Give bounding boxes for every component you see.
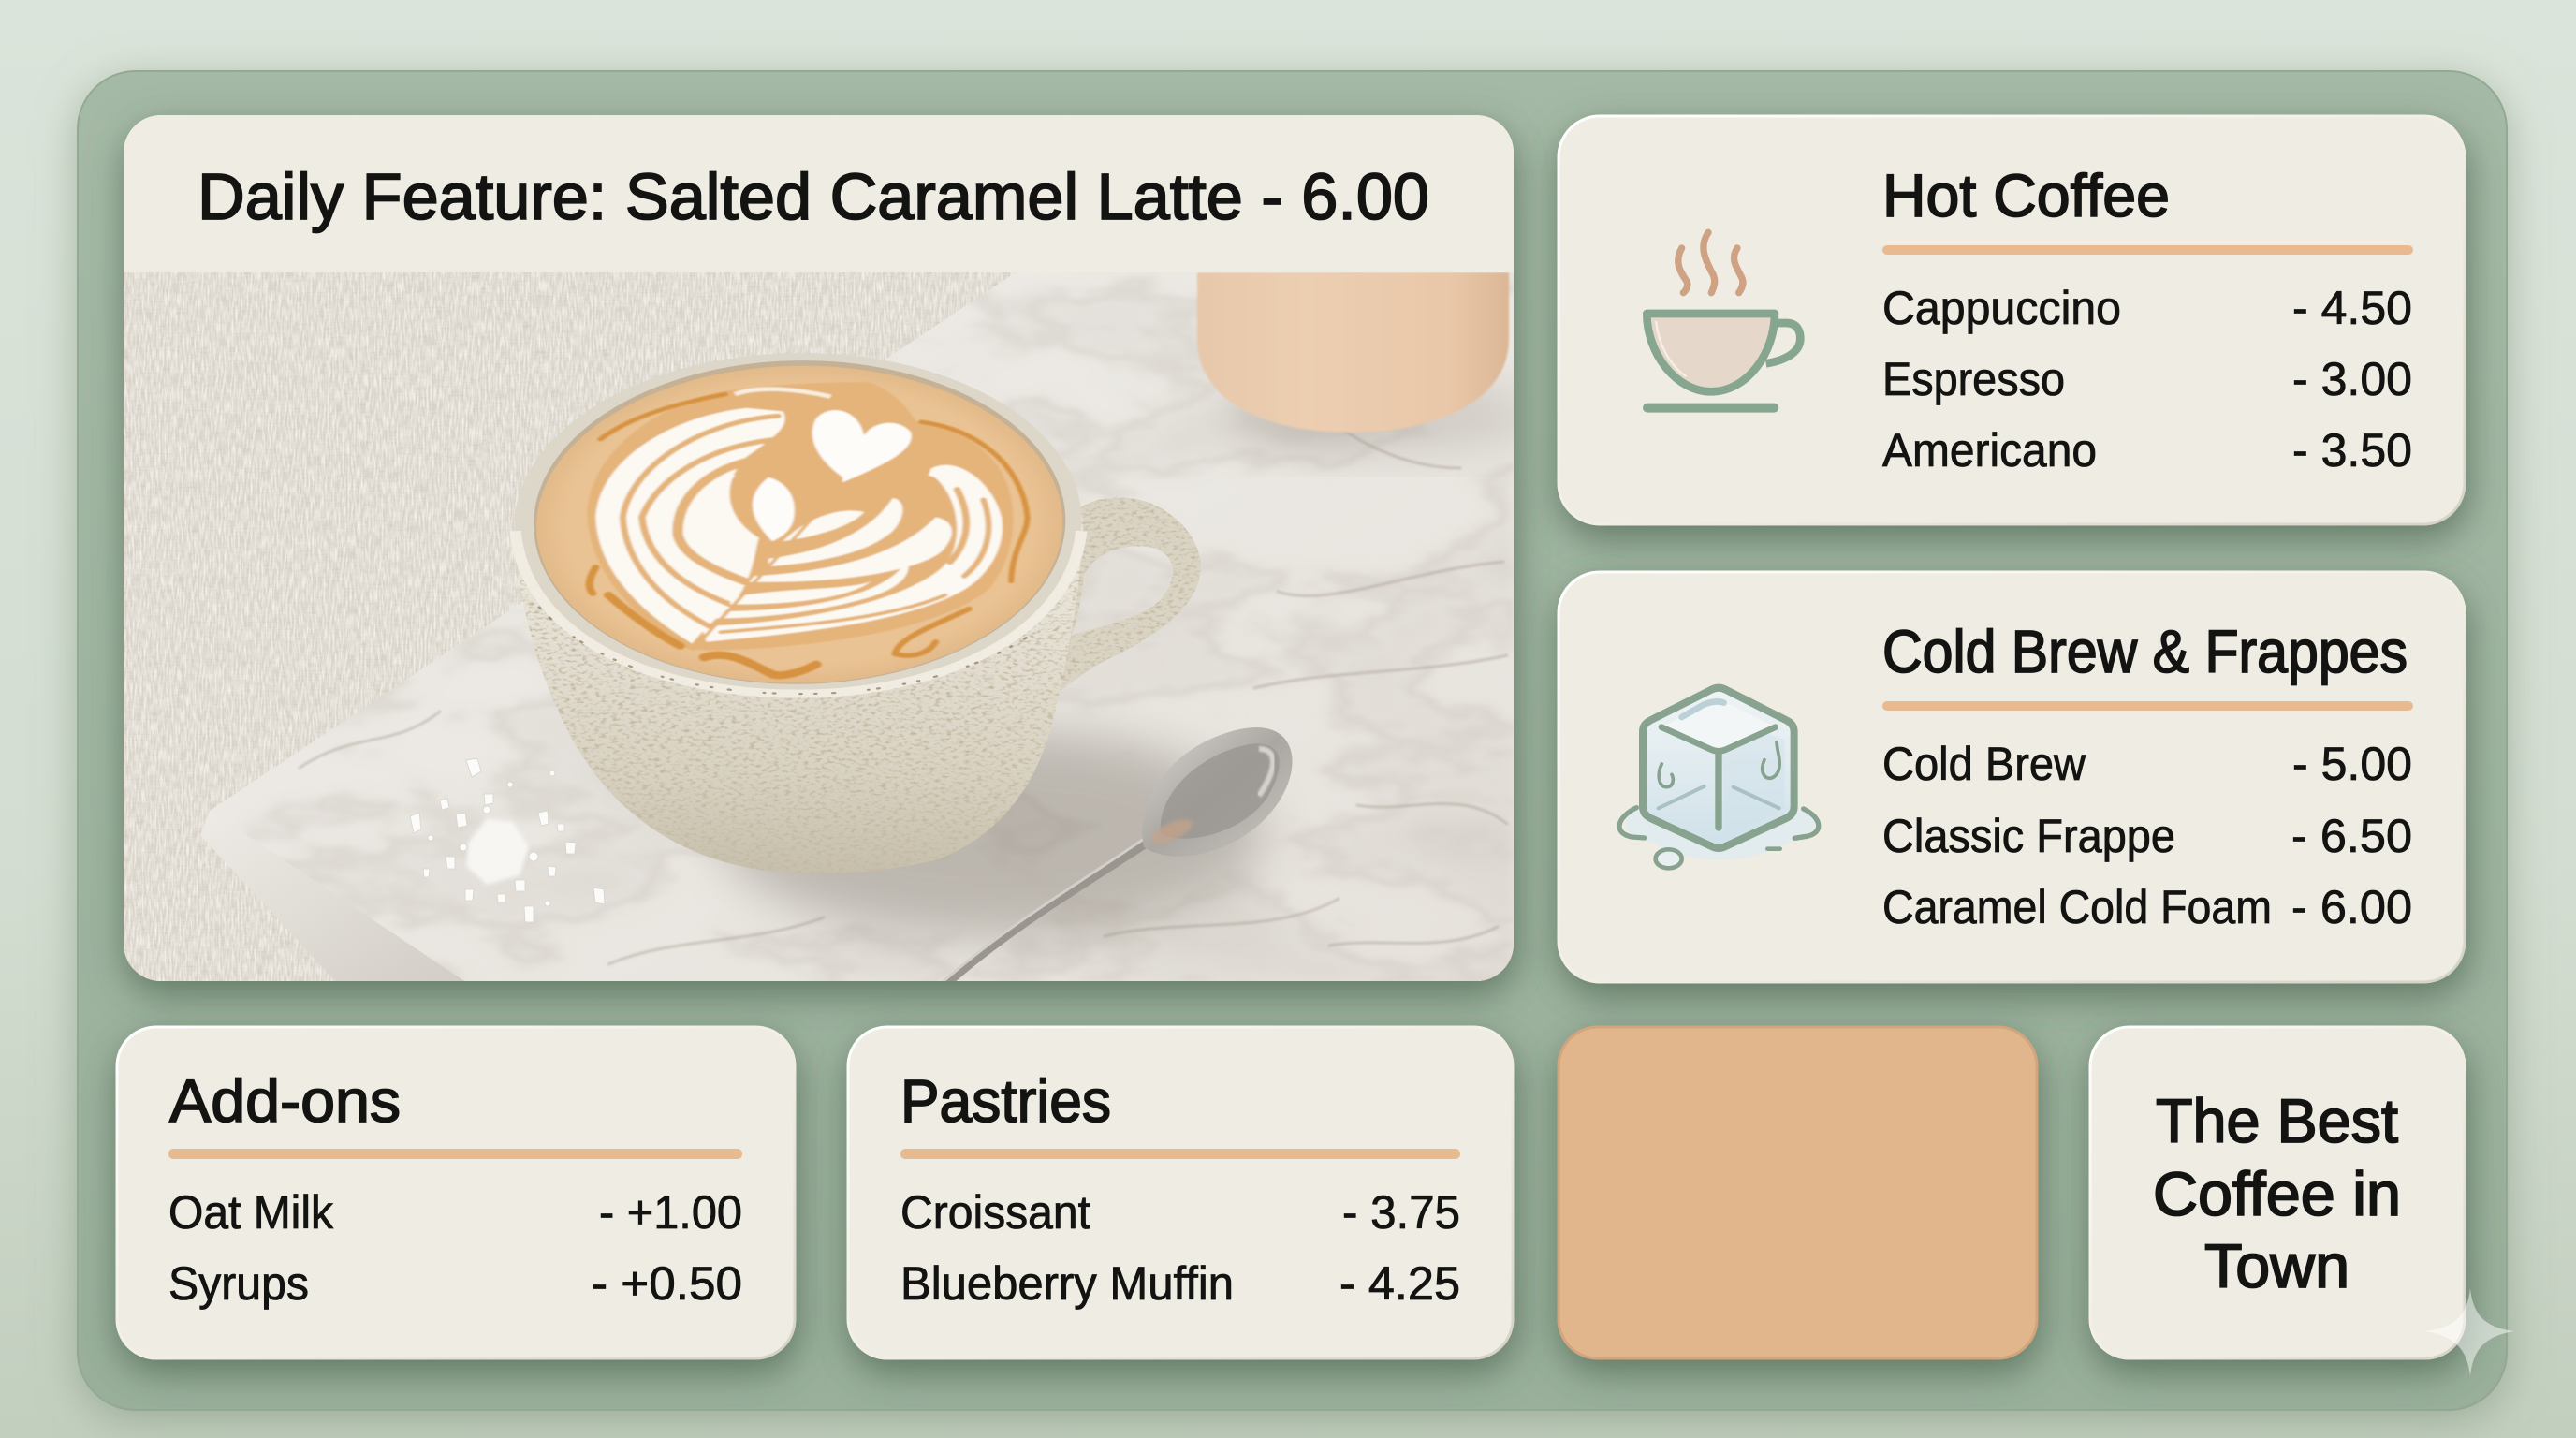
cold brew items: - 5.00 — [2292, 738, 2412, 790]
feature title: Daily Feature: Salted Caramel Latte - 6.00 — [198, 160, 1429, 233]
hot coffee items — [1882, 282, 2412, 477]
hot coffee items: - 4.50 — [2292, 282, 2412, 334]
slogan text: Town — [2204, 1231, 2349, 1300]
cold brew items: - 6.00 — [2291, 881, 2412, 933]
panel: blank peach block — [1559, 1027, 2037, 1358]
panel: hot coffee — [1559, 116, 2465, 524]
spoon — [942, 727, 1293, 985]
stem — [692, 484, 842, 651]
heart second — [753, 477, 795, 541]
pastry items: Blueberry Muffin — [900, 1257, 1234, 1310]
slogan text — [2153, 1086, 2401, 1300]
icon: coffee cup — [1643, 232, 1800, 413]
latte stripes — [622, 416, 988, 632]
slogan text: Coffee in — [2153, 1159, 2401, 1228]
mug body — [515, 517, 1083, 873]
slogan text: The Best — [2156, 1086, 2398, 1155]
heading: pastries: Pastries — [900, 1067, 1111, 1135]
mug handle — [1060, 498, 1201, 691]
add-on items: Syrups — [168, 1257, 309, 1310]
heading: cold brew and frappes: Cold Brew & Frappes — [1882, 618, 2408, 685]
heart top — [812, 410, 912, 482]
add-on items: Oat Milk — [168, 1186, 334, 1239]
add-on items — [168, 1186, 742, 1310]
latte art — [587, 382, 1013, 651]
pastry items: Croissant — [900, 1186, 1090, 1239]
hot coffee items: - 3.50 — [2292, 424, 2412, 477]
cold brew items: Cold Brew — [1882, 738, 2086, 790]
marble slab — [200, 272, 1514, 982]
add-on items: - +0.50 — [592, 1257, 742, 1310]
cold brew items: - 6.50 — [2291, 810, 2412, 862]
photo: latte on marble — [124, 272, 1544, 985]
panel: cold brew and frappes — [1559, 572, 2465, 982]
pastry items: - 3.75 — [1342, 1186, 1460, 1239]
cold brew items: Caramel Cold Foam — [1882, 881, 2272, 933]
salt — [410, 758, 605, 922]
feathers — [711, 475, 952, 618]
bottle — [1197, 272, 1544, 454]
hot coffee items: Espresso — [1882, 353, 2065, 405]
cold brew items: Classic Frappe — [1882, 810, 2175, 862]
heading: add-ons: Add-ons — [169, 1067, 401, 1135]
panel: pastries — [848, 1027, 1513, 1358]
heading: hot coffee: Hot Coffee — [1882, 162, 2170, 229]
hot coffee items: Cappuccino — [1882, 282, 2121, 334]
icon: sparkle — [2425, 1288, 2514, 1376]
pastry items: - 4.25 — [1339, 1257, 1460, 1310]
mug shadow — [721, 730, 1264, 936]
add-on items: - +1.00 — [599, 1186, 742, 1239]
panel: slogan — [2090, 1027, 2465, 1358]
mug rim — [506, 345, 1090, 701]
cold brew items — [1882, 738, 2412, 933]
hot coffee items: Americano — [1882, 424, 2097, 477]
caramel drizzle — [590, 394, 1028, 675]
mug — [506, 345, 1201, 873]
feature header bar — [124, 115, 1514, 272]
coffee surface — [526, 354, 1074, 691]
icon: ice cube — [1619, 688, 1819, 868]
pastry items — [900, 1186, 1460, 1310]
hot coffee items: - 3.00 — [2292, 353, 2412, 405]
panel: add-ons — [117, 1027, 795, 1358]
panel: daily feature — [124, 115, 1544, 985]
